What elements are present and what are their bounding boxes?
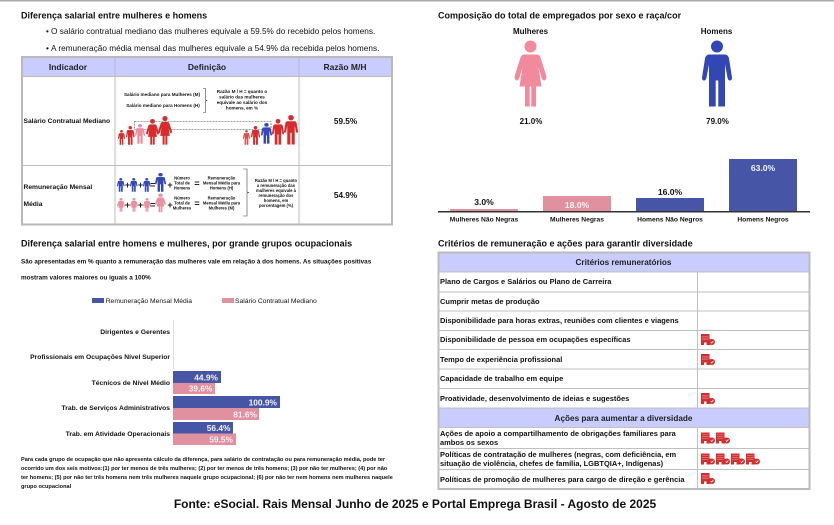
bar chart: sex and race composition: Homens Não Negros — [637, 216, 703, 224]
section header: actions: Ações para aumentar a diversidade — [555, 414, 693, 423]
table header: Indicador — [49, 62, 88, 72]
bar chart: sex and race composition: 18.0% — [565, 200, 590, 210]
bar chart: sex and race composition: 63.0% — [751, 163, 776, 173]
action rows: situação de violência, chefes de família, LGBTQIA+, Indígenas) — [440, 459, 664, 468]
definition diagram: mean pay: Total de — [174, 180, 191, 186]
row: mean monthly pay — [24, 169, 358, 216]
definition diagram: mean pay: Remuneração — [208, 196, 236, 200]
definition diagram: mean pay: Razão M / H = quanto — [255, 178, 298, 183]
bar chart: occupational groups: 59.5% — [209, 434, 234, 444]
criteria rows — [440, 277, 679, 403]
definition diagram: median salary: homens, em % — [226, 106, 258, 110]
heading: employee composition: Composição do total de empregados por sexo e raça/cor — [438, 10, 682, 20]
row: mean monthly pay: Remuneração Mensal — [24, 184, 92, 191]
definition diagram: mean pay: Número — [174, 196, 190, 200]
text block: chart explanation: mostram valores maiores ou iguais a 100% — [21, 274, 151, 282]
bar chart: occupational groups: 44.9% — [194, 372, 219, 382]
action rows — [440, 429, 685, 484]
bar chart: occupational groups: Dirigentes e Gerentes — [100, 329, 170, 336]
heading: salary gap: Diferença salarial entre mulheres e homens — [21, 10, 207, 20]
pictogram: men 79% — [701, 27, 733, 126]
text block: key findings: O salário contratual mediano das mulheres equivale a 59.5% do recebido pelos homens. — [51, 27, 375, 36]
bar chart: occupational groups: Trab. em Atividade Operacionais — [66, 431, 170, 438]
bar chart: sex and race composition: Homens Negros — [737, 216, 789, 224]
definition diagram: mean pay: Total de — [174, 200, 191, 206]
bar chart: occupational groups: 56.4% — [207, 423, 231, 433]
bar chart: sex and race composition: Mulheres Não Negras — [450, 216, 518, 224]
pictogram: women 21%: 21.0% — [520, 117, 542, 126]
action rows: Políticas de promoção de mulheres para cargo de direção e gerência — [440, 475, 685, 484]
definition diagram: mean pay: + — [125, 200, 130, 210]
footnote — [21, 457, 393, 490]
definition diagram: mean pay: Mensal Média para — [203, 200, 241, 206]
definition diagram: mean pay: homens, em — [264, 198, 288, 203]
pictogram: men 79%: Homens — [701, 27, 733, 36]
footnote: grupo ocupacional — [21, 484, 72, 490]
heading: occupational groups: Diferença salarial entre homens e mulheres, por grande grupos ocupacionais — [21, 238, 352, 248]
text block: key findings: • — [46, 27, 49, 36]
pictogram: women 21%: Mulheres — [513, 27, 549, 36]
definition diagram: mean pay: = — [194, 178, 200, 188]
bar chart: occupational groups — [30, 320, 280, 445]
criteria rows: Disponibilidade para horas extras, reuniões com clientes e viagens — [440, 316, 679, 325]
bar chart: sex and race composition: 3.0% — [474, 197, 494, 207]
footnote: ocorrido um dos seis motivos:(1) por ter menos de três mulheres; (2) por ter menos de três homens; (3) por não ter mulheres; (4) por não — [21, 466, 388, 472]
bar chart: occupational groups: Trab. de Serviços Administrativos — [61, 405, 170, 412]
text block: key findings: • — [46, 44, 49, 53]
definition diagram: mean pay: a remuneração das — [257, 183, 296, 188]
definition diagram: mean pay: Remuneração — [208, 176, 236, 180]
criteria rows: Capacidade de trabalho em equipe — [440, 374, 563, 383]
pictogram: men 79%: 79.0% — [706, 117, 729, 126]
definition diagram: mean pay: + — [167, 180, 173, 190]
definition diagram: mean pay — [117, 169, 298, 216]
criteria rows: Proatividade, desenvolvimento de ideias e sugestões — [440, 394, 629, 403]
text block: chart explanation — [21, 258, 372, 282]
bar chart: occupational groups: Técnicos de Nível Médio — [92, 380, 170, 387]
bar chart: sex and race composition: 16.0% — [658, 187, 683, 197]
definition diagram: mean pay: Mensal Média para — [203, 180, 241, 186]
section header: criteria: Critérios remuneratórios — [575, 258, 672, 267]
legend — [92, 298, 317, 305]
table header: Definição — [188, 62, 226, 72]
criteria rows: Tempo de experiência profissional — [440, 355, 562, 364]
definition diagram: mean pay: = — [150, 180, 155, 190]
top rule — [0, 0, 834, 2]
row: mean monthly pay: 54.9% — [334, 191, 358, 200]
bar chart: occupational groups: 100.9% — [249, 398, 278, 408]
action rows: Políticas de contratação de mulheres (negras, com deficiência, em — [440, 450, 677, 459]
definition diagram: mean pay: Mulheres — [173, 206, 192, 210]
definition diagram: mean pay: + — [167, 200, 173, 210]
text block: key findings — [46, 27, 379, 53]
row: contractual salary — [24, 88, 358, 145]
bar chart: occupational groups: 81.6% — [233, 410, 258, 420]
definition diagram: mean pay: Homens (H) — [210, 186, 234, 190]
bar chart: occupational groups: Profissionais em Ocupações Nível Superior — [30, 354, 170, 361]
definition diagram: median salary: Salário mediano para Homens (H) — [126, 103, 200, 108]
table header — [49, 62, 366, 72]
table header: Razão M/H — [324, 62, 366, 72]
definition diagram: mean pay: remuneração dos — [259, 193, 294, 198]
criteria rows: Disponibilidade de pessoa em ocupações específicas — [440, 335, 631, 344]
definition diagram: mean pay: + — [138, 200, 143, 210]
definition diagram: mean pay: Mulheres (M) — [209, 206, 235, 210]
icons: company with check — [701, 334, 760, 484]
bar chart: sex and race composition — [438, 159, 810, 224]
footnote: ter homens; (5) por não ter três homens nem três mulheres naquele grupo ocupacional; (6) por não ter nem homens nem mulheres naquele — [21, 475, 393, 481]
footnote: Para cada grupo de ocupação que não apresenta cálculo da diferença, para salário de contratação ou para remuneração média, pode ter — [21, 457, 386, 463]
action rows: Ações de apoio a compartilhamento de obrigações familiares para — [440, 429, 677, 438]
bar chart: occupational groups: 39.6% — [189, 384, 213, 394]
row: mean monthly pay: Média — [24, 201, 43, 208]
definition diagram: median salary: equivale ao salário dos — [217, 100, 268, 105]
definition diagram: mean pay: mulheres equivale à — [256, 188, 297, 193]
source line: Fonte: eSocial. Rais Mensal Junho de 2025 e Portal Emprega Brasil - Agosto de 2025 — [174, 497, 657, 511]
heading: diversity criteria: Critérios de remuneração e ações para garantir diversidade — [438, 238, 693, 248]
definition diagram: mean pay: + — [138, 180, 143, 190]
definition diagram: mean pay: porcentagem (%) — [259, 203, 294, 208]
pictogram: women 21% — [513, 27, 549, 126]
definition diagram: median salary: Salário mediano para Mulheres (M) — [124, 92, 201, 97]
criteria rows: Plano de Cargos e Salários ou Plano de Carreira — [440, 277, 612, 286]
definition diagram: mean pay: Homens — [174, 186, 191, 190]
definition diagram: mean pay: Número — [174, 176, 190, 180]
text block: chart explanation: São apresentadas em % quanto a remuneração das mulheres vale em relação à dos homens. As situações positivas — [21, 258, 372, 266]
definition diagram: median salary: Razão M / H = quanto o — [217, 89, 267, 94]
bar chart: sex and race composition: Mulheres Negras — [550, 216, 604, 224]
legend: Remuneração Mensal Média — [106, 298, 192, 305]
criteria rows: Cumprir metas de produção — [440, 297, 540, 306]
definition diagram: mean pay: = — [194, 198, 200, 208]
table: salary indicators — [22, 57, 392, 225]
row: contractual salary: Salário Contratual Mediano — [24, 118, 110, 125]
definition diagram: median salary — [118, 88, 298, 145]
table: remuneration criteria and diversity actions — [438, 252, 810, 489]
row: contractual salary: 59.5% — [334, 117, 358, 126]
action rows: ambos os sexos — [440, 438, 498, 447]
definition diagram: median salary: salário das mulheres — [219, 94, 265, 100]
text block: key findings: A remuneração média mensal das mulheres equivale a 54.9% da recebida pelos homens. — [51, 44, 379, 53]
definition diagram: mean pay: = — [150, 200, 155, 210]
legend: Salário Contratual Mediano — [235, 298, 317, 305]
definition diagram: mean pay: + — [125, 180, 130, 190]
